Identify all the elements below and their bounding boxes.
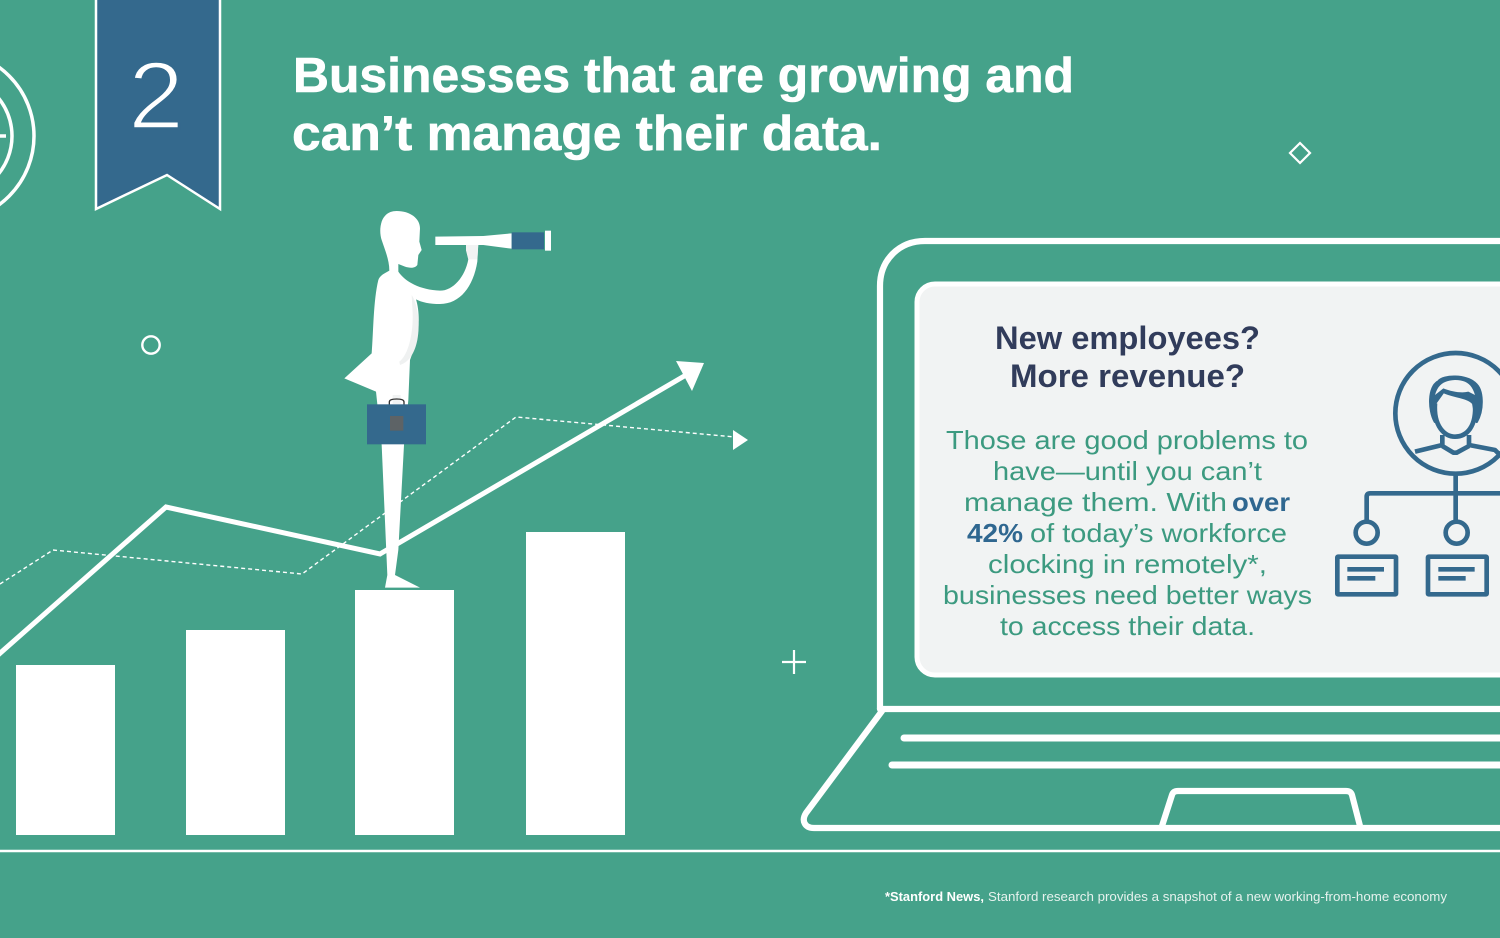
panel body text: businesses need better ways bbox=[943, 580, 1312, 610]
panel heading: More revenue? bbox=[1010, 358, 1245, 394]
footnote: *Stanford News, bbox=[885, 890, 984, 904]
laptop outline bbox=[804, 241, 1500, 828]
hair highlight bbox=[1435, 380, 1475, 395]
icon: small circle bbox=[142, 336, 160, 354]
panel body text: have—until you can’t bbox=[993, 456, 1263, 486]
neck and shoulders bbox=[1415, 435, 1500, 455]
panel body text bbox=[943, 425, 1312, 641]
panel body text: over bbox=[1232, 487, 1290, 517]
panel body text: 42% bbox=[967, 518, 1023, 548]
ribbon badge with number 2: 2 bbox=[128, 42, 184, 150]
note cards bbox=[1337, 557, 1396, 594]
arm shadow bbox=[399, 295, 419, 365]
connectors bbox=[1367, 473, 1500, 522]
panel body text: to access their data. bbox=[1000, 611, 1255, 641]
dotted trend line with arrow bbox=[0, 417, 748, 584]
face bbox=[1435, 403, 1475, 437]
title: can’t manage their data. bbox=[292, 107, 882, 161]
title: Businesses that are growing and bbox=[293, 49, 1074, 103]
title bbox=[292, 49, 1074, 161]
icon: plus bbox=[782, 650, 806, 674]
icon: employee org chart bbox=[1337, 353, 1500, 594]
businessman with telescope and briefcase bbox=[344, 211, 551, 588]
solid growth line with arrow bbox=[0, 361, 704, 655]
panel body text: of today’s workforce bbox=[1030, 518, 1287, 548]
laptop screen panel bbox=[917, 284, 1500, 675]
decorative target circles bbox=[0, 51, 34, 221]
panel heading bbox=[995, 320, 1260, 394]
footnote: Stanford research provides a snapshot of a new working-from-home economy bbox=[988, 890, 1448, 904]
panel body text: manage them. With bbox=[964, 487, 1227, 517]
hair bbox=[1430, 377, 1481, 422]
figure silhouette bbox=[344, 211, 478, 588]
panel body text: Those are good problems to bbox=[946, 425, 1308, 455]
panel heading: New employees? bbox=[995, 320, 1260, 356]
telescope bbox=[435, 231, 551, 251]
baseline divider bbox=[0, 850, 1500, 852]
hand bbox=[466, 243, 478, 259]
icon: diamond bbox=[1290, 143, 1310, 163]
panel body text: clocking in remotely*, bbox=[988, 549, 1267, 579]
briefcase bbox=[367, 395, 426, 444]
ribbon badge with number 2 bbox=[96, 0, 220, 209]
bar chart bbox=[16, 532, 625, 835]
